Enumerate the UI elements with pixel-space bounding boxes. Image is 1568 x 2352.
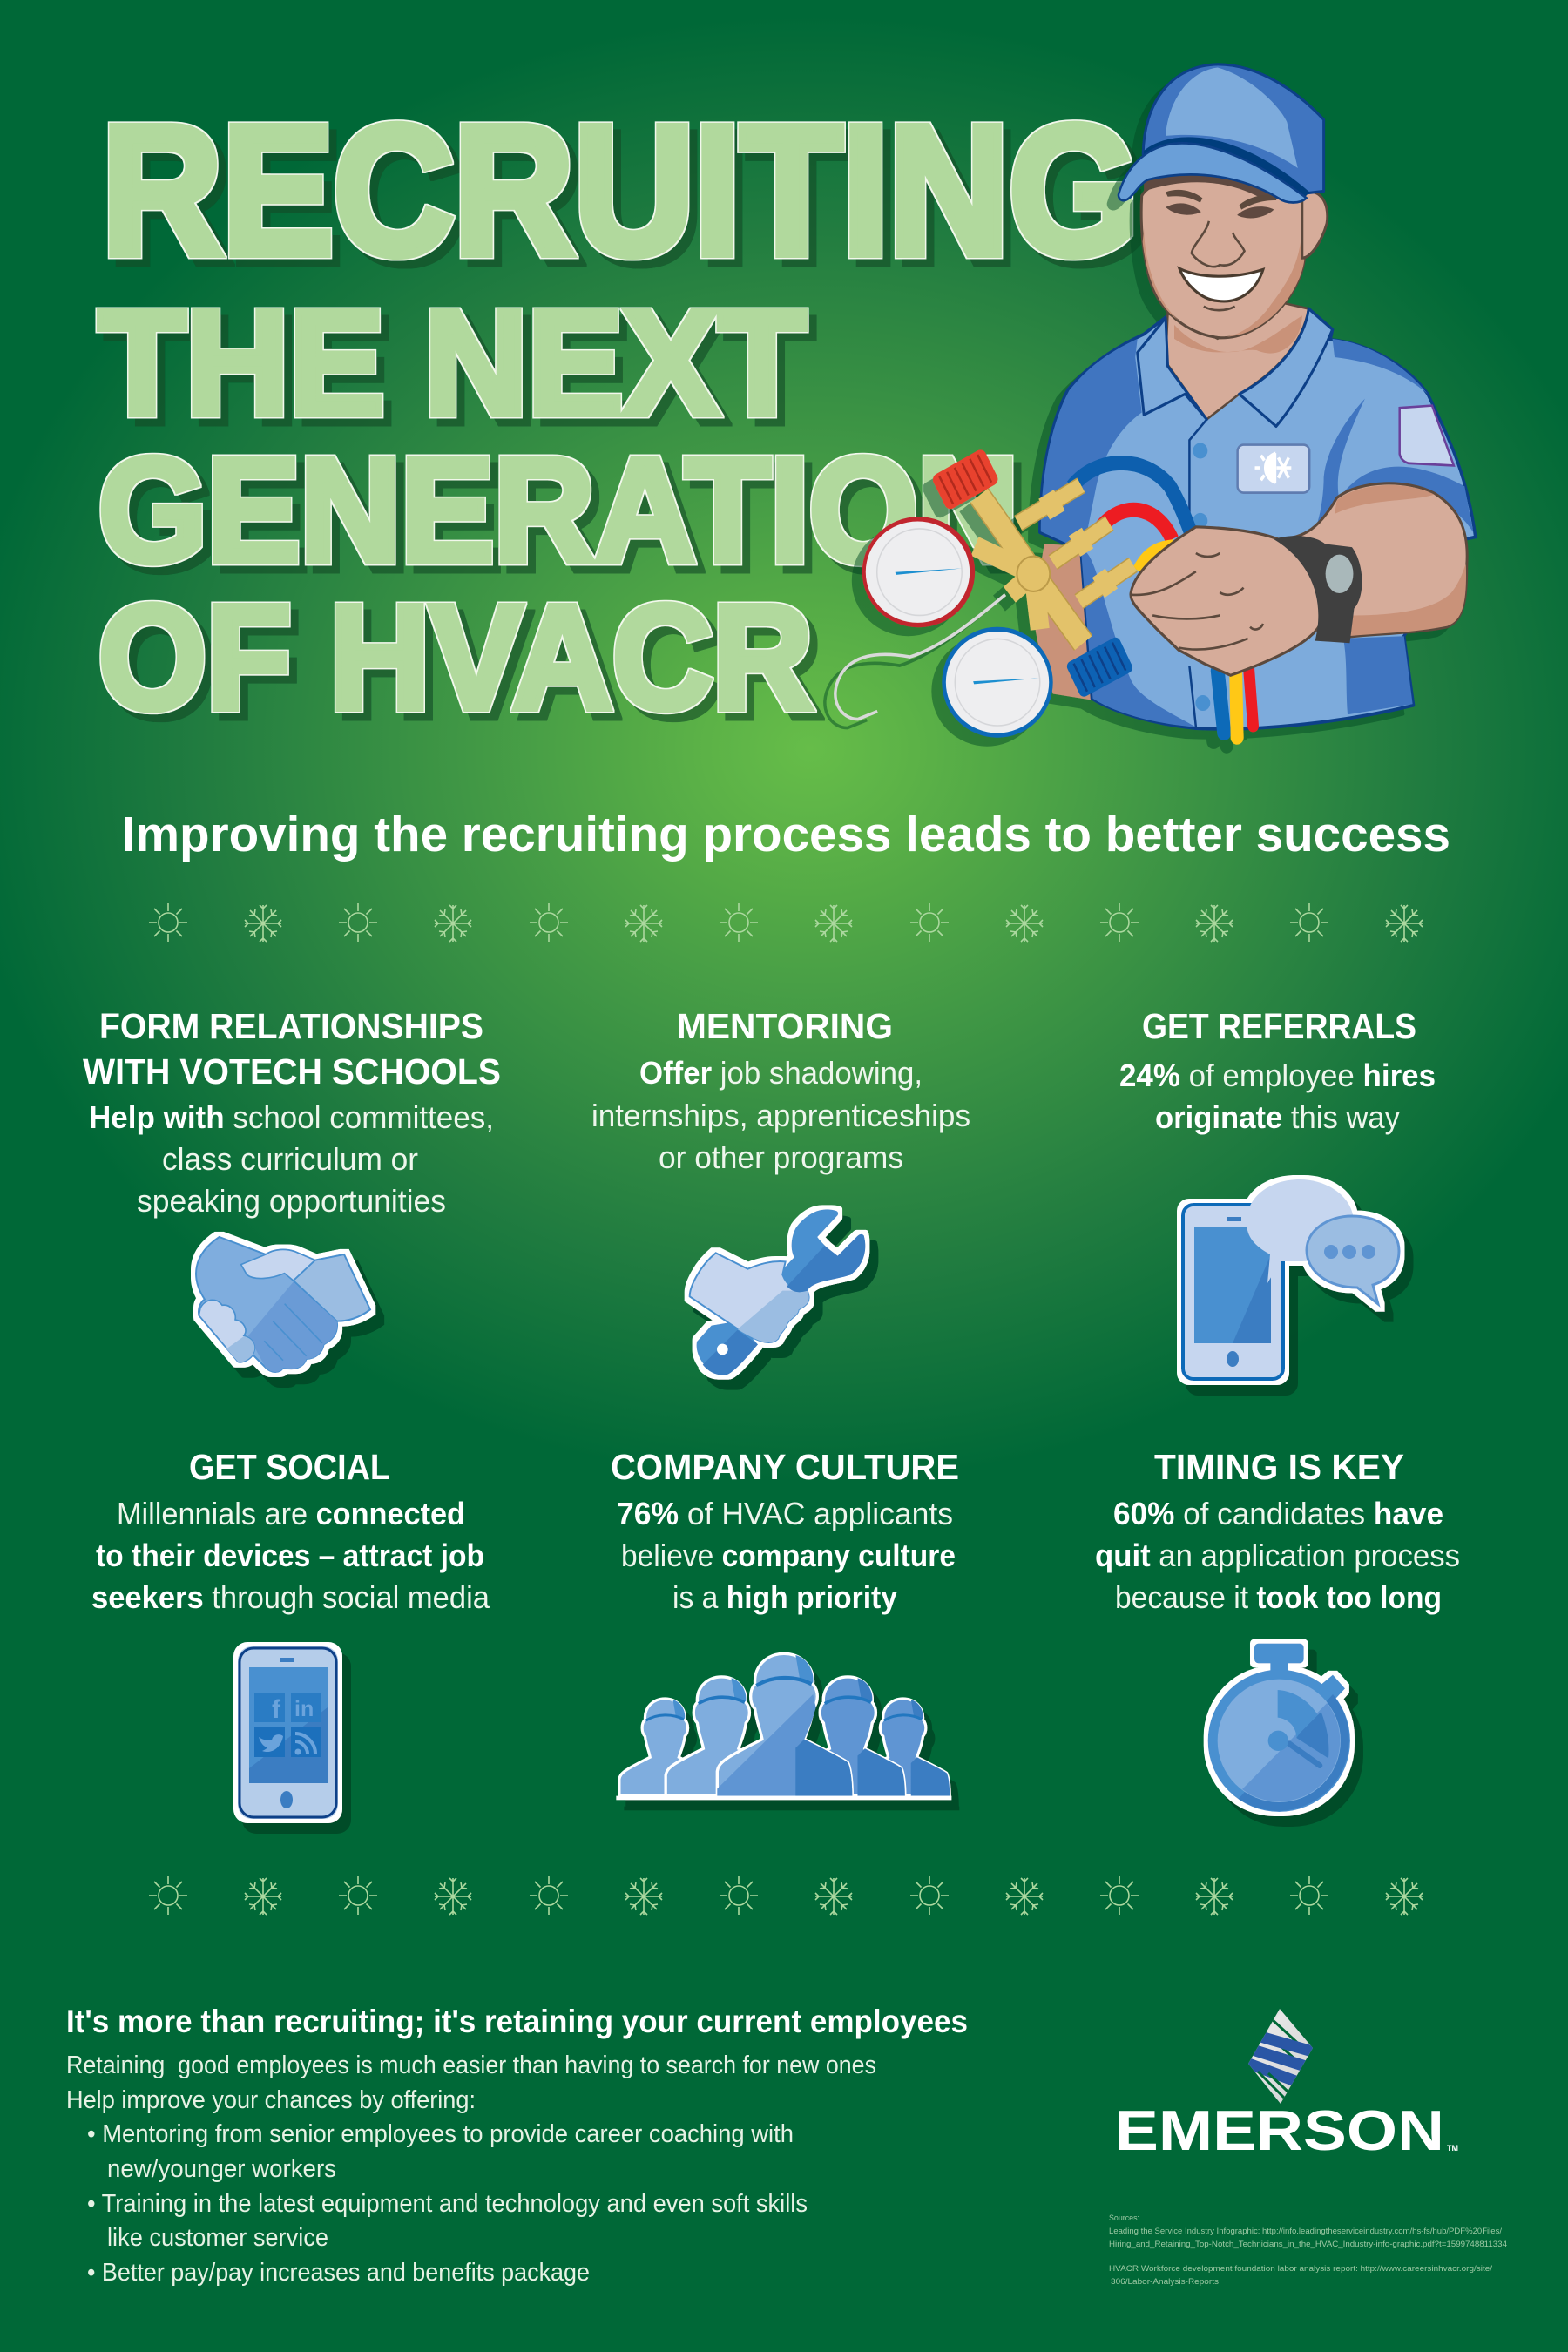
heading: COMPANY CULTURE: [611, 1447, 959, 1487]
body line 2: originate this way: [1155, 1099, 1400, 1135]
button 2: [1193, 513, 1207, 529]
face shade: [1220, 228, 1304, 337]
body line 3: because it took too long: [1115, 1579, 1442, 1615]
body line 3: or other programs: [659, 1139, 903, 1175]
red gauge: [862, 517, 975, 627]
body line 3: is a high priority: [672, 1579, 897, 1615]
panel: retaining employees: [66, 2004, 968, 2287]
body line 1: 60% of candidates have: [1113, 1496, 1443, 1531]
source 2: HVACR Workforce development foundation labor analysis report: http://www.careersinhvacr.org/site/: [1109, 2264, 1492, 2274]
far right figure: [857, 1699, 950, 1796]
icon: wrench in hand: [690, 1209, 865, 1375]
hanging hoses: [1218, 668, 1254, 738]
shirt body: [1040, 308, 1476, 729]
sleeve patch: [1400, 406, 1454, 465]
title: [98, 87, 1139, 740]
body line 1: 76% of HVAC applicants: [617, 1496, 953, 1531]
name badge: [1238, 445, 1309, 493]
hair: [1144, 167, 1282, 198]
body line 2: internships, apprenticeships: [591, 1098, 970, 1133]
icon: handshake: [196, 1237, 370, 1372]
heading: GET REFERRALS: [1142, 1006, 1416, 1046]
arm shading top: [1335, 485, 1434, 514]
cheek shade left: [1143, 228, 1179, 321]
intro line 1: Retaining good employees is much easier than having to search for new ones: [66, 2051, 876, 2079]
heading: FORM RELATIONSHIPS: [99, 1006, 483, 1046]
logo mark: [1248, 2009, 1313, 2104]
icon: smartphone social tiles: [238, 1646, 338, 1819]
shirt shading: [1041, 339, 1142, 551]
blue hose: [1072, 463, 1191, 532]
cap highlight: [1166, 68, 1298, 168]
heading line 2: WITH VOTECH SCHOOLS: [83, 1051, 501, 1092]
technician illustration: [835, 64, 1476, 738]
base bar: [616, 1796, 951, 1800]
panel: referrals: [1119, 1006, 1436, 1379]
blue knob: [1065, 636, 1134, 699]
sun and snowflake divider top: [149, 903, 1423, 942]
left figure: [666, 1677, 779, 1796]
body line 2: class curriculum or: [162, 1141, 418, 1177]
right figure: [792, 1677, 905, 1796]
watch face: [1326, 555, 1353, 593]
nose: [1192, 221, 1245, 267]
far left figure: [619, 1699, 712, 1796]
needle: [896, 568, 962, 575]
face: [1141, 175, 1304, 338]
cap crown: [1143, 64, 1324, 193]
wordmark: EMERSON: [1115, 2099, 1444, 2162]
bullet 1: • Mentoring from senior employees to provide career coaching with: [87, 2120, 794, 2148]
body line 2: believe company culture: [621, 1538, 956, 1573]
eyes: [1166, 203, 1274, 218]
manifold: [975, 485, 1133, 643]
bullet 1 continued: new/younger workers: [107, 2155, 336, 2183]
ear: [1302, 192, 1328, 258]
placket: [1189, 419, 1206, 727]
body line 2: quit an application process: [1095, 1538, 1460, 1573]
sun and snowflake divider bottom: [149, 1876, 1423, 1915]
title line 4: OF HVACR: [98, 575, 813, 740]
source 2 continued: 306/Labor-Analysis-Reports: [1111, 2277, 1219, 2287]
body line 1: Millennials are connected: [117, 1496, 465, 1531]
button 3: [1195, 695, 1210, 711]
collar left: [1138, 318, 1206, 419]
blue gauge: [942, 627, 1053, 738]
icon: stopwatch: [1208, 1644, 1350, 1812]
body line 3: seekers through social media: [91, 1579, 490, 1615]
heading: TIMING IS KEY: [1154, 1447, 1404, 1487]
subtitle: Improving the recruiting process leads to better success: [122, 807, 1450, 862]
section heading: It's more than recruiting; it's retaining your current employees: [66, 2004, 968, 2039]
eyebrows: [1166, 190, 1278, 210]
chin line: [1204, 307, 1235, 310]
right arm: [1274, 483, 1467, 638]
body line 3: speaking opportunities: [137, 1183, 446, 1219]
panel: social: [91, 1447, 490, 1819]
bullet 2: • Training in the latest equipment and technology and even soft skills: [87, 2190, 808, 2218]
heading: GET SOCIAL: [189, 1447, 390, 1487]
body line 1: Help with school committees,: [89, 1099, 494, 1135]
collar right: [1240, 308, 1333, 426]
centre figure: [717, 1653, 852, 1796]
gauge wire: [835, 595, 1005, 720]
arm shading: [1348, 564, 1466, 636]
sources label: Sources:: [1109, 2213, 1139, 2223]
sources: [1109, 2213, 1507, 2287]
icon: smartphone social tiles: in: [294, 1697, 314, 1721]
left forearm behind manifold: [1034, 544, 1096, 700]
cap band: [1144, 137, 1309, 203]
icon: smartphone social tiles: f: [272, 1695, 281, 1724]
fist: [1131, 527, 1321, 675]
bullet 2 continued: like customer service: [107, 2224, 328, 2252]
panel: timing: [1095, 1447, 1460, 1812]
red hose: [1100, 510, 1173, 539]
title line 2: THE NEXT: [98, 280, 806, 446]
button 1: [1193, 443, 1207, 458]
panel: company culture: [611, 1447, 959, 1800]
icon: phone with speech bubbles: [1183, 1179, 1399, 1379]
logo: Emerson: [1119, 2009, 1458, 2151]
title line 1: RECRUITING: [102, 87, 1139, 293]
panel: mentoring: [591, 1006, 970, 1375]
yellow hose: [1133, 539, 1174, 574]
badge emblem: [1255, 453, 1291, 483]
title line 3: GENERATION: [98, 428, 1018, 593]
bullet 3: • Better pay/pay increases and benefits package: [87, 2259, 590, 2287]
trademark: TM: [1447, 2144, 1458, 2153]
finger lines: [1131, 553, 1263, 650]
source 1 continued: Hiring_and_Retaining_Top-Notch_Technicians_in_the_HVAC_Industry-info-graphic.pdf?t=1599748811334: [1109, 2240, 1507, 2249]
intro line 2: Help improve your chances by offering:: [66, 2086, 476, 2114]
body line 1: 24% of employee hires: [1119, 1058, 1436, 1093]
panel: votech schools: [83, 1006, 501, 1372]
body line 2: to their devices – attract job: [96, 1538, 484, 1573]
needle: [973, 678, 1039, 684]
heading: MENTORING: [677, 1006, 893, 1046]
body line 1: Offer job shadowing,: [639, 1055, 923, 1091]
icon: group of people: [616, 1653, 951, 1800]
neck shadow: [1174, 315, 1302, 354]
cap visor: [1119, 143, 1307, 203]
source 1: Leading the Service Industry Infographic: http://info.leadingtheserviceindustry.com/hs-fs/hub/PDF%20Files/: [1109, 2227, 1502, 2236]
red knob: [931, 448, 1000, 511]
watch: [1274, 536, 1362, 643]
neck: [1166, 301, 1308, 419]
smile: [1179, 268, 1263, 301]
